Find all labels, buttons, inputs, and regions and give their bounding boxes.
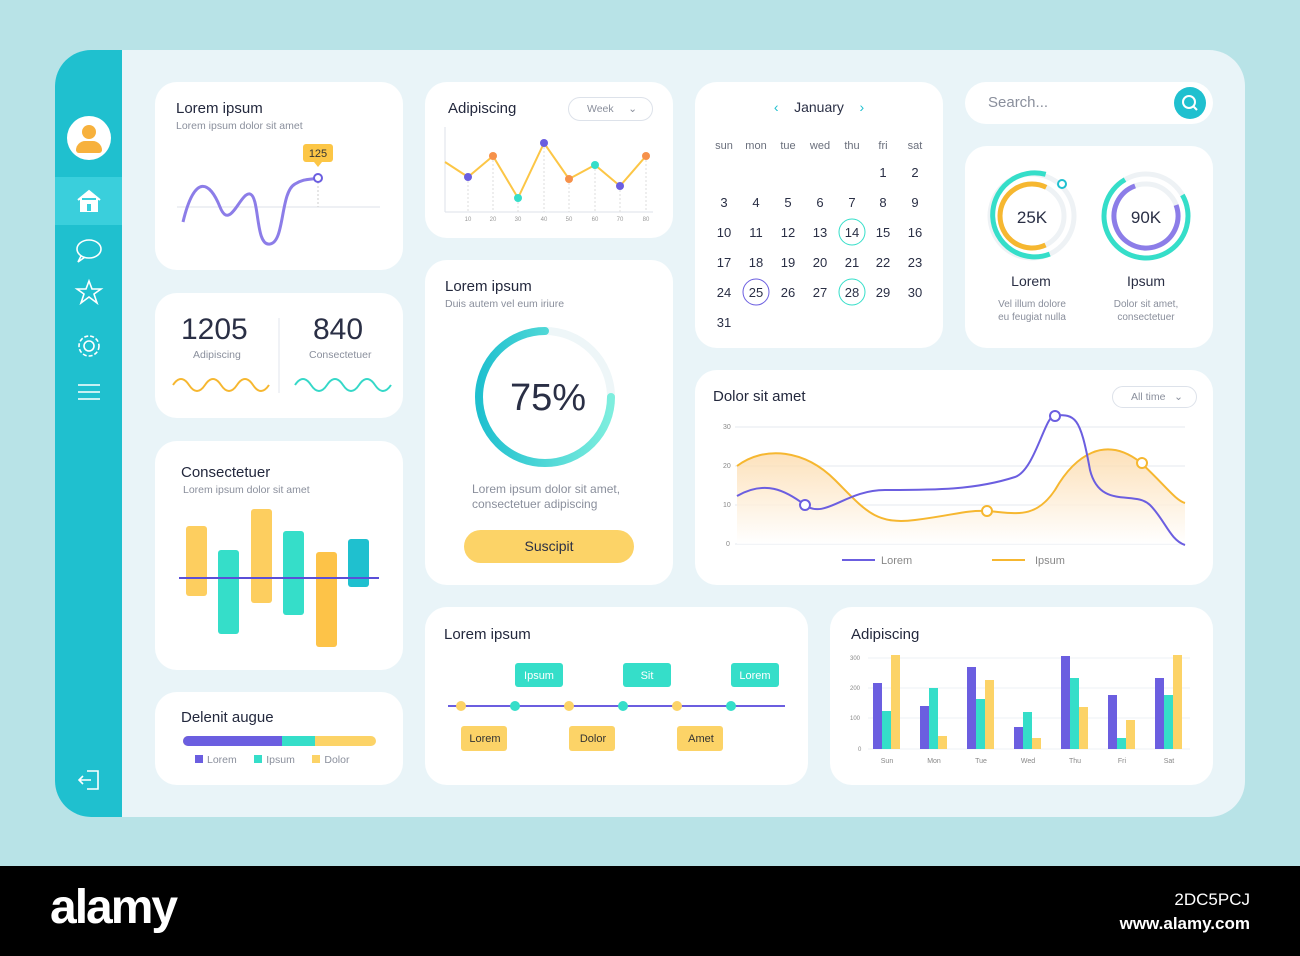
card: timeline: Lorem (469, 733, 501, 745)
card: calendar: 4 (752, 195, 760, 210)
card: calendar: 12 (781, 225, 795, 240)
card: calendar: 27 (813, 285, 827, 300)
card: calendar: 14 (845, 225, 859, 240)
card: Adipiscing bar chart: 100 (850, 716, 861, 722)
card: Dolor sit amet area chart: 0 (726, 541, 730, 548)
card: calendar: thu (844, 140, 860, 152)
card: 75% donut: Suscipit (524, 538, 574, 554)
card: Consectetuer bars: Consectetuer (181, 464, 270, 481)
card: calendar: 26 (781, 285, 795, 300)
card: rings: 25K (1017, 208, 1048, 227)
card: calendar: 18 (749, 255, 763, 270)
card: Lorem ipsum line chart: 125 (309, 148, 327, 160)
footer text (1120, 890, 1250, 933)
card: Adipiscing line chart: 30 (515, 217, 522, 223)
card: calendar: 15 (876, 225, 890, 240)
card: calendar: 7 (848, 195, 856, 210)
card: timeline: Ipsum (524, 670, 554, 682)
card: calendar: fri (878, 140, 888, 152)
card: calendar: 22 (876, 255, 890, 270)
icon: home active (55, 177, 122, 225)
footer bar (0, 866, 1300, 956)
card: calendar: 1 (879, 165, 887, 180)
sidebar icons (74, 239, 104, 400)
card: Lorem ipsum line chart: Lorem ipsum (176, 100, 263, 117)
card: Adipiscing bar chart: 300 (850, 656, 861, 662)
card: rings: Dolor sit amet, (1114, 299, 1178, 310)
main dashboard frame (55, 50, 1245, 817)
card: rings: Vel illum dolore (998, 299, 1066, 310)
card: Adipiscing bar chart: Thu (1069, 758, 1081, 765)
card: Delenit augue: Delenit augue (181, 709, 274, 726)
card: calendar: 5 (784, 195, 792, 210)
card: Adipiscing bar chart: Sun (881, 758, 893, 765)
card: 75% donut: Duis autem vel eum iriure (445, 298, 564, 310)
card: Consectetuer bars (155, 441, 403, 670)
card: Adipiscing line chart: 80 (643, 217, 650, 223)
card: Adipiscing bar chart: 200 (850, 686, 861, 692)
card: calendar: 19 (781, 255, 795, 270)
card: calendar: 25 (749, 285, 763, 300)
card: Adipiscing line chart: 70 (617, 217, 624, 223)
card: rings: 90K (1131, 208, 1162, 227)
card: calendar: 29 (876, 285, 890, 300)
icon: search (1174, 87, 1206, 119)
card: calendar: sun (715, 140, 733, 152)
card: timeline: Amet (688, 733, 714, 745)
card: Dolor sit amet area chart: 20 (723, 463, 731, 470)
card: calendar: 30 (908, 285, 922, 300)
footer logo: alamy (50, 881, 176, 934)
card: search (965, 82, 1213, 124)
card: 75% donut: consectetuer adipiscing (472, 497, 597, 511)
card: Lorem ipsum line chart (155, 82, 403, 270)
card: Dolor sit amet area chart: Lorem (881, 555, 912, 567)
card: timeline: Dolor (580, 733, 606, 745)
card: Adipiscing bar chart: Wed (1021, 758, 1035, 765)
card: rings (965, 146, 1213, 348)
card: Adipiscing bar chart (830, 607, 1213, 785)
card: search: Search... (988, 94, 1048, 111)
card: calendar: 17 (717, 255, 731, 270)
card: rings: Lorem (1011, 273, 1051, 289)
footer text: 2DC5PCJ (1174, 890, 1250, 909)
card: calendar: 10 (717, 225, 731, 240)
card: rings: Ipsum (1127, 273, 1165, 289)
card: Dolor sit amet area chart: All time ⌄ (1131, 391, 1183, 403)
card: Dolor sit amet area chart: 30 (723, 424, 731, 431)
card: Adipiscing line chart: 10 (465, 217, 472, 223)
card: 75% donut: Lorem ipsum (445, 278, 532, 295)
card: stats 1205/840: 1205 (181, 313, 248, 346)
card: Adipiscing bar chart: Fri (1118, 758, 1127, 765)
card: calendar: 24 (717, 285, 731, 300)
card: Dolor sit amet area chart (695, 370, 1213, 585)
card: calendar: 20 (813, 255, 827, 270)
card: Adipiscing line chart: Adipiscing (448, 100, 516, 117)
card: timeline: Lorem ipsum (444, 626, 531, 643)
card: stats 1205/840: Adipiscing (193, 349, 241, 361)
icon: logout (78, 770, 99, 790)
card: Adipiscing bar chart: Adipiscing (851, 626, 919, 643)
card: calendar: 16 (908, 225, 922, 240)
card: calendar: 8 (879, 195, 887, 210)
card: timeline: Sit (641, 670, 653, 682)
card: stats 1205/840: Consectetuer (309, 349, 371, 361)
card: calendar: 9 (911, 195, 919, 210)
card: Delenit augue (155, 692, 403, 785)
card: calendar: 21 (845, 255, 859, 270)
card: calendar: 2 (911, 165, 919, 180)
card: calendar: 13 (813, 225, 827, 240)
card: timeline: Lorem (739, 670, 771, 682)
card: calendar: wed (809, 140, 830, 152)
card: 75% donut: 75% (510, 377, 586, 419)
card: Adipiscing bar chart: Mon (927, 758, 941, 765)
card: rings: eu feugiat nulla (998, 312, 1066, 323)
card: Adipiscing bar chart: Sat (1164, 758, 1174, 765)
card: Adipiscing bar chart: Tue (975, 758, 987, 765)
card: Adipiscing line chart: 60 (592, 217, 599, 223)
card: Adipiscing bar chart: 0 (858, 747, 862, 753)
card: Adipiscing line chart (425, 82, 673, 238)
card: Lorem ipsum line chart: Lorem ipsum dolor sit amet (176, 120, 303, 132)
footer text: www.alamy.com (1120, 914, 1250, 933)
card: calendar: sat (908, 140, 922, 152)
card: calendar: mon (745, 140, 767, 152)
card: Adipiscing line chart: 50 (566, 217, 573, 223)
card: 75% donut: Lorem ipsum dolor sit amet, (472, 482, 620, 496)
card: Adipiscing line chart: 40 (541, 217, 548, 223)
card: stats 1205/840: 840 (313, 313, 363, 346)
card: calendar: ‹ January › (774, 99, 864, 115)
card: calendar: 31 (717, 315, 731, 330)
card: timeline (425, 607, 808, 785)
card: Adipiscing line chart: 20 (490, 217, 497, 223)
card: Dolor sit amet area chart: Dolor sit amet (713, 388, 806, 405)
card: calendar (695, 82, 943, 348)
card: calendar: tue (780, 140, 796, 152)
card: Adipiscing line chart: Week ⌄ (587, 103, 637, 115)
card: stats 1205/840 (155, 293, 403, 418)
card: Delenit augue: Lorem Ipsum Dolor (207, 754, 349, 766)
icon: avatar (67, 116, 111, 160)
card: rings: consectetuer (1117, 312, 1175, 323)
card: Dolor sit amet area chart: Ipsum (1035, 555, 1065, 567)
card: calendar: 28 (845, 285, 859, 300)
card: Dolor sit amet area chart: 10 (723, 502, 731, 509)
card: calendar: 3 (720, 195, 728, 210)
sidebar (55, 50, 122, 817)
card: calendar: 23 (908, 255, 922, 270)
card: calendar: 11 (749, 225, 763, 240)
card: 75% donut (425, 260, 673, 585)
card: calendar: 6 (816, 195, 824, 210)
card: Consectetuer bars: Lorem ipsum dolor sit amet (183, 484, 310, 496)
